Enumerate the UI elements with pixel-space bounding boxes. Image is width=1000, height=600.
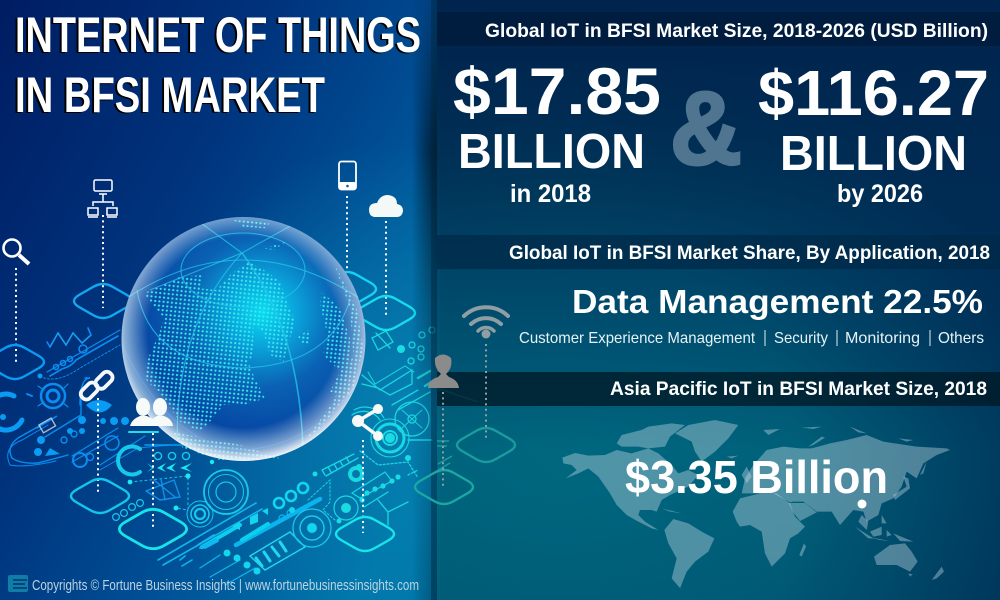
world map (562, 420, 950, 590)
application list: Customer Experience Management (519, 330, 756, 347)
title: IN BFSI MARKET (15, 67, 325, 123)
heading band: Asia Pacific: Asia Pacific IoT in BFSI Market Size, 2018 (610, 379, 987, 400)
title: INTERNET OF THINGS (13, 8, 419, 64)
stat: 2018 market size (453, 54, 661, 208)
icon: chain link (79, 370, 115, 402)
heading band: market share: Global IoT in BFSI Market Share, By Application, 2018 (509, 243, 990, 264)
heading band: market share (437, 235, 1000, 269)
icon: wifi (464, 307, 508, 438)
title (13, 7, 421, 124)
panel: right statistics background (412, 0, 1000, 600)
diamond nodes under panel (415, 388, 515, 504)
diamond nodes (0, 272, 415, 551)
title: INTERNET OF THINGS (15, 7, 421, 63)
globe (122, 215, 366, 461)
icon: share nodes (352, 404, 382, 440)
left circuit elements (0, 328, 170, 470)
icon: smartphone (339, 162, 356, 190)
icon: magnifier (4, 240, 29, 264)
stat: 2026 market size (758, 57, 989, 208)
circuit board decoration (0, 327, 436, 585)
stat: 2018 market size: BILLION (458, 125, 645, 179)
centre circuit elements (113, 432, 248, 527)
application list: Monitoring (845, 330, 920, 347)
icon: cloud (369, 195, 403, 217)
stat: 2026 market size: by 2026 (837, 180, 923, 208)
heading band: market size (437, 12, 1000, 46)
map marker dot (858, 500, 866, 508)
stat: 2018 market size: $17.85 (453, 54, 661, 128)
africa, eurasia and oceania (733, 427, 950, 580)
americas (562, 420, 752, 590)
footer logo (8, 575, 28, 592)
application list: Others (938, 330, 984, 347)
ampersand: & (670, 71, 742, 187)
stat: 2026 market size: $116.27 (758, 57, 989, 129)
dotted leader lines (16, 196, 386, 533)
stat: 2026 market size: BILLION (780, 127, 967, 181)
icon: people (130, 398, 173, 426)
heading band: Asia Pacific (437, 372, 1000, 406)
application list (519, 330, 984, 347)
icon: computer network (88, 180, 117, 217)
right circuit elements (308, 327, 436, 525)
heading band: market size: Global IoT in BFSI Market Size, 2018-2026 (USD Billion) (485, 21, 988, 42)
stat: Asia Pacific market size: $3.35 Billion (625, 451, 888, 503)
dotted continents (143, 220, 363, 460)
stat: data management share: Data Management 22.5% (572, 283, 983, 320)
lower diagonal strips (158, 483, 331, 585)
copyright: Copyrights © Fortune Business Insights | www.fortunebusinessinsights.com (32, 578, 419, 594)
stat: 2018 market size: in 2018 (510, 180, 591, 208)
application list: Security (774, 330, 828, 347)
globe grid lines (122, 224, 358, 450)
icon: person (428, 354, 459, 487)
title: IN BFSI MARKET (13, 68, 323, 124)
left panel background (0, 0, 440, 600)
